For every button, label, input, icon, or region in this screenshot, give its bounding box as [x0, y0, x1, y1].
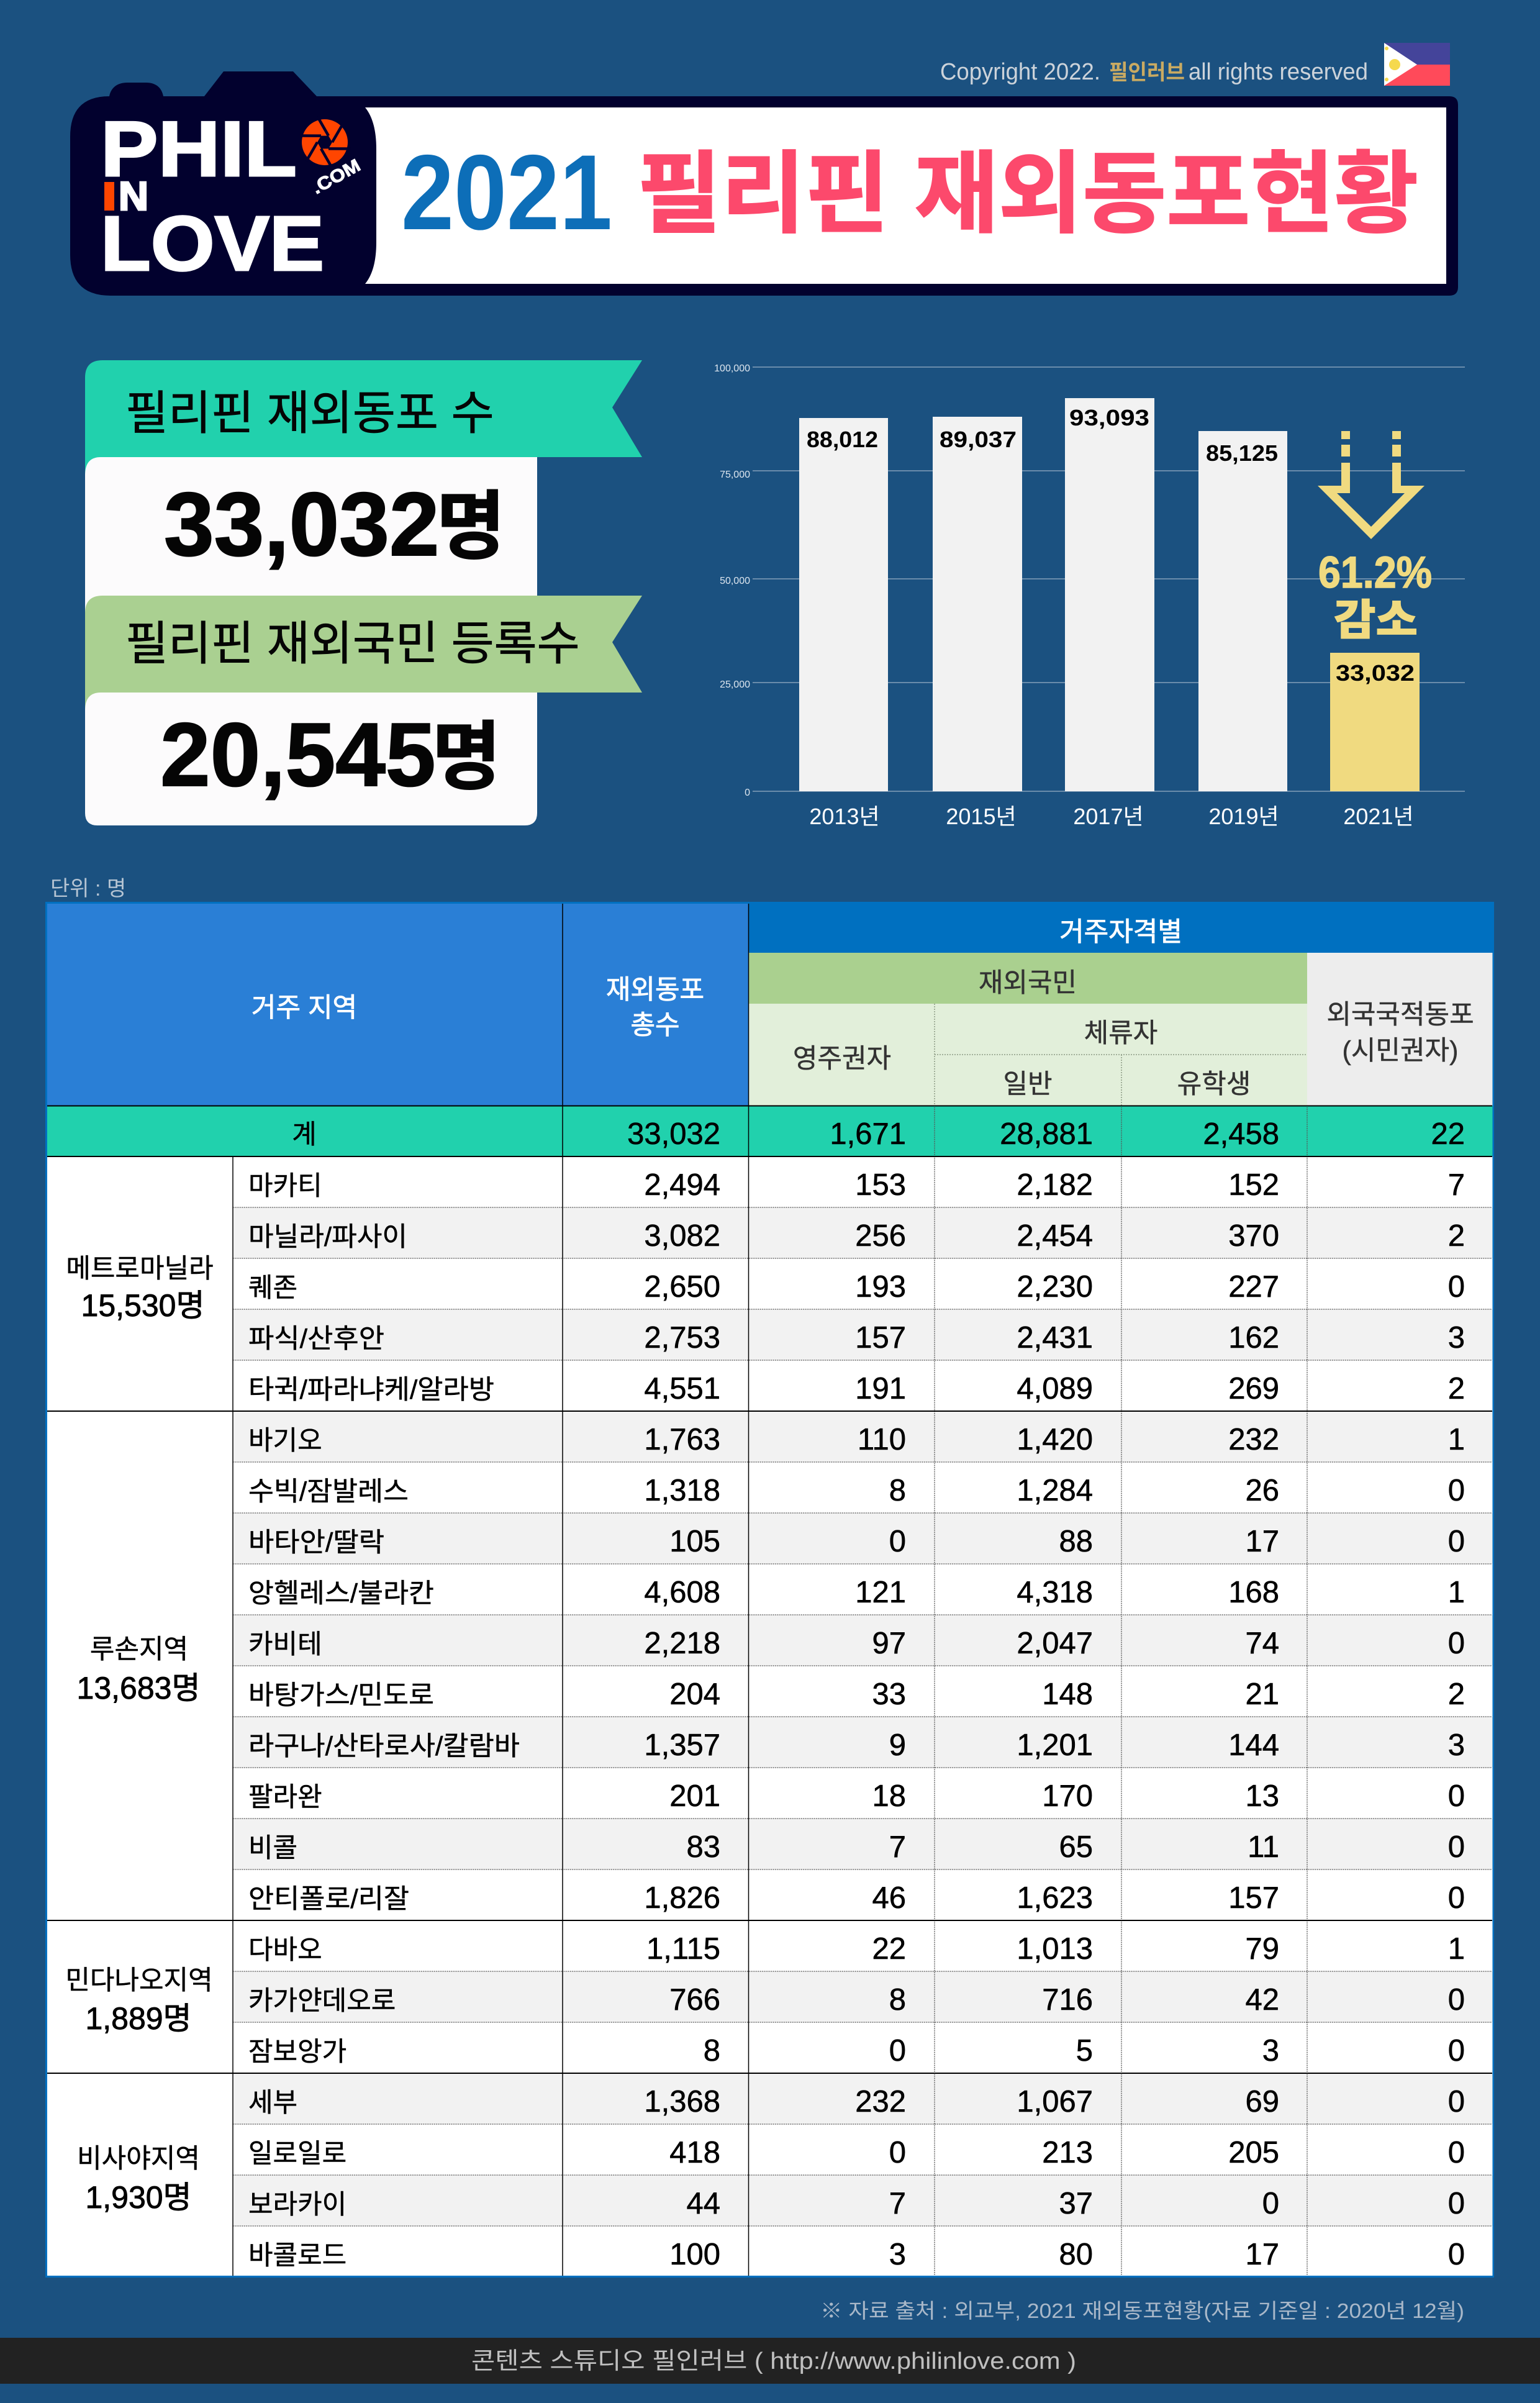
copyright line: Copyright 2022.: [940, 59, 1100, 85]
row: 바기오: 232: [1228, 1423, 1279, 1456]
row: 바콜로드: 3: [889, 2238, 906, 2271]
row: 라구나/산타로사/칼람바: 라구나/산타로사/칼람바: [248, 1732, 520, 1761]
row: 세부: 232: [855, 2085, 906, 2119]
row: 앙헬레스/불라칸: 앙헬레스/불라칸: [248, 1579, 434, 1609]
row: 퀘존: 0: [1448, 1270, 1465, 1304]
row: 카가얀데오로: 0: [1448, 1983, 1465, 2017]
row: 마카티: 153: [855, 1168, 906, 1202]
total row: [47, 1106, 1493, 1156]
row: 라구나/산타로사/칼람바: 1,201: [1017, 1728, 1093, 1762]
callout: 61.2% decrease: 감소: [1334, 597, 1418, 644]
row: 파식/산후안: 3: [1448, 1321, 1465, 1355]
region: mindanao: 민다나오지역: [65, 1966, 213, 1996]
row: 다바오: 22: [872, 1932, 906, 1966]
panel: overseas korean count: [85, 360, 642, 621]
title text: [401, 133, 1418, 252]
row: 앙헬레스/불라칸: 4,318: [1017, 1576, 1093, 1609]
bar: 2021: 33,032: [1336, 660, 1415, 686]
row: 비콜: 0: [1448, 1830, 1465, 1864]
footer bar: 콘텐츠 스튜디오 필인러브 ( http://www.philinlove.com ): [471, 2348, 1076, 2374]
region: mindanao: [65, 1966, 213, 2036]
region: metro manila: [66, 1254, 214, 1323]
row: 라구나/산타로사/칼람바: 144: [1228, 1728, 1279, 1762]
row: 바콜로드: [248, 2238, 1465, 2271]
row: 보라카이: [233, 2175, 1493, 2226]
row: 타귁/파라냐케/알라방: 191: [855, 1372, 906, 1406]
table header: 체류자: [1084, 1019, 1157, 1048]
row: 세부: 0: [1448, 2085, 1465, 2119]
row: 일로일로: 205: [1228, 2136, 1279, 2169]
table header: 재외국민: [979, 968, 1077, 998]
row: 보라카이: 보라카이: [248, 2190, 346, 2220]
row: 파식/산후안: 162: [1228, 1321, 1279, 1355]
table header: 거주 지역: [251, 993, 357, 1023]
row: 팔라완: 팔라완: [248, 1783, 322, 1812]
row: 다바오: 다바오: [248, 1935, 322, 1965]
row: 바타안/딸락: 105: [669, 1525, 720, 1558]
row: 마닐라/파사이: 2,454: [1017, 1219, 1093, 1253]
row: 잠보앙가: 5: [1076, 2034, 1093, 2068]
row: 바타안/딸락: 88: [1059, 1525, 1093, 1558]
row: 라구나/산타로사/칼람바: 3: [1448, 1728, 1465, 1762]
card: 20,545: [85, 693, 537, 825]
row: 마카티: 7: [1448, 1168, 1465, 1202]
row: 일로일로: 0: [889, 2136, 906, 2169]
region: visayas: 비사야지역: [77, 2144, 200, 2174]
bar: 2021: 2021년: [1343, 804, 1414, 829]
row: 보라카이: 0: [1262, 2187, 1279, 2220]
bar: 2019: 85,125: [1206, 440, 1278, 466]
row: 일로일로: 213: [1042, 2136, 1093, 2169]
bar: 2019: 2019년: [1208, 804, 1279, 829]
chart gridlines and y axis: 25,000: [720, 679, 750, 690]
row: 잠보앙가: 0: [889, 2034, 906, 2068]
row: 바콜로드: 80: [1059, 2238, 1093, 2271]
row: 안티폴로/리잘: [248, 1881, 1465, 1915]
copyright line: [940, 59, 1368, 85]
logo wordmark: LOVE: [101, 201, 324, 287]
bar: 2017: 93,093: [1069, 405, 1149, 430]
footer bar: [0, 2338, 1540, 2384]
row: 세부: [233, 2073, 1493, 2124]
logo wordmark: [101, 105, 364, 287]
row: 비콜: 65: [1059, 1830, 1093, 1864]
row: 일로일로: 0: [1448, 2136, 1465, 2169]
card: 20,545: 명: [432, 715, 500, 799]
panel: registered nationals count: [85, 596, 642, 825]
row: 카가얀데오로: 8: [889, 1983, 906, 2017]
row: 라구나/산타로사/칼람바: 1,357: [644, 1728, 720, 1762]
table header: [47, 904, 1493, 1106]
row: 바기오: 1,763: [644, 1423, 720, 1456]
row: 비콜: 11: [1248, 1830, 1279, 1864]
bar chart: [714, 363, 1465, 829]
copyright line: all rights reserved: [1189, 59, 1368, 85]
row: 퀘존: 193: [855, 1270, 906, 1304]
row: 안티폴로/리잘: 46: [872, 1881, 906, 1915]
camera body rounded edge: [354, 107, 376, 284]
region: luzon: 루손지역: [90, 1635, 188, 1665]
bar: 2013: 88,012: [807, 427, 878, 452]
row: 잠보앙가: [248, 2034, 1465, 2068]
table header: 외국국적동포: [1326, 1000, 1474, 1030]
row: 잠보앙가: 8: [704, 2034, 720, 2068]
row: 안티폴로/리잘: 1,826: [644, 1881, 720, 1915]
row: 비콜: 7: [889, 1830, 906, 1864]
card: 20,545: 20,545: [160, 704, 436, 805]
card: 33,032: 33,032: [164, 474, 440, 575]
ribbon: overseas koreans: [85, 360, 642, 481]
row: 일로일로: 일로일로: [248, 2139, 346, 2169]
row: 마닐라/파사이: 2: [1448, 1219, 1465, 1253]
region: metro manila: 15,530명: [81, 1288, 204, 1323]
row: 수빅/잠발레스: 수빅/잠발레스: [248, 1477, 409, 1507]
row: 세부: 1,067: [1017, 2085, 1093, 2119]
row: 잠보앙가: 잠보앙가: [248, 2037, 346, 2067]
row: 카가얀데오로: 716: [1042, 1983, 1093, 2017]
region: metro manila: 메트로마닐라: [66, 1254, 214, 1284]
chart gridlines and y axis: 0: [745, 788, 750, 798]
row: 바기오: 110: [858, 1423, 906, 1456]
row: 안티폴로/리잘: 157: [1228, 1881, 1279, 1915]
table header: 유학생: [1177, 1070, 1251, 1099]
row: 카비테: 0: [1448, 1627, 1465, 1660]
row: 팔라완: 13: [1245, 1779, 1279, 1813]
ribbon: registered nationals: 필리핀 재외국민 등록수: [125, 617, 580, 670]
row: 다바오: [248, 1932, 1465, 1966]
total row: 33,032: [627, 1117, 720, 1151]
row: 마닐라/파사이: 256: [855, 1219, 906, 1253]
row: 라구나/산타로사/칼람바: 9: [889, 1728, 906, 1762]
row: 퀘존: 227: [1228, 1270, 1279, 1304]
row: 카비테: 카비테: [248, 1630, 322, 1660]
row: 수빅/잠발레스: 0: [1448, 1474, 1465, 1507]
chart gridlines and y axis: [714, 363, 1465, 798]
bar: 2021: [1330, 653, 1420, 829]
row: 파식/산후안: 파식/산후안: [248, 1324, 384, 1354]
row: 수빅/잠발레스: [248, 1474, 1465, 1507]
ribbon: overseas koreans: 필리핀 재외동포 수: [125, 387, 494, 439]
unit label: 단위 : 명: [50, 877, 126, 901]
row: 다바오: 1,115: [646, 1932, 720, 1966]
row: 비콜: 83: [686, 1830, 720, 1864]
table header: 영주권자: [793, 1044, 891, 1074]
row: 카가얀데오로: 42: [1245, 1983, 1279, 2017]
row: 앙헬레스/불라칸: 1: [1448, 1576, 1465, 1609]
callout: 61.2% decrease: [1318, 548, 1432, 644]
card: 33,032: [85, 457, 537, 621]
row: 일로일로: [248, 2136, 1465, 2169]
row: 수빅/잠발레스: 26: [1245, 1474, 1279, 1507]
row: 바탕가스/민도로: 33: [872, 1678, 906, 1711]
row: 잠보앙가: 3: [1262, 2034, 1279, 2068]
region: visayas: [77, 2144, 200, 2215]
logo wordmark: .COM: [309, 156, 364, 198]
row: 카비테: 97: [872, 1627, 906, 1660]
row: 팔라완: [248, 1779, 1465, 1813]
row: 바타안/딸락: 17: [1245, 1525, 1279, 1558]
row: 파식/산후안: 2,431: [1017, 1321, 1093, 1355]
row: 카비테: 2,047: [1017, 1627, 1093, 1660]
row: 바타안/딸락: 바타안/딸락: [248, 1528, 384, 1558]
region: visayas: 1,930명: [85, 2180, 192, 2215]
row: 안티폴로/리잘: 안티폴로/리잘: [248, 1884, 409, 1914]
row: 보라카이: 44: [686, 2187, 720, 2220]
row: 타귁/파라냐케/알라방: 4,089: [1017, 1372, 1093, 1406]
title text: 2021: [401, 133, 612, 252]
row: 바기오: 1,420: [1017, 1423, 1093, 1456]
logo wordmark: PHIL: [101, 105, 297, 193]
row: 바탕가스/민도로: 2: [1448, 1678, 1465, 1711]
row: 바탕가스/민도로: 148: [1042, 1678, 1093, 1711]
row: 바콜로드: 17: [1245, 2238, 1279, 2271]
row: 타귁/파라냐케/알라방: 2: [1448, 1372, 1465, 1406]
row: 마카티: 2,494: [644, 1168, 720, 1202]
chart gridlines and y axis: 100,000: [714, 363, 750, 374]
table header: 일반: [1003, 1070, 1053, 1099]
row: 안티폴로/리잘: 1,623: [1017, 1881, 1093, 1915]
row: 카비테: 74: [1245, 1627, 1279, 1660]
row: 잠보앙가: 0: [1448, 2034, 1465, 2068]
bar: 2013: [799, 418, 888, 829]
row: 팔라완: 0: [1448, 1779, 1465, 1813]
row: 바기오: 바기오: [248, 1426, 322, 1456]
icon: philippine flag: [1384, 43, 1450, 86]
camera body and banner frame: [70, 71, 1458, 296]
row: 바기오: [233, 1411, 1493, 1462]
row: 팔라완: 170: [1042, 1779, 1093, 1813]
total row: 계: [292, 1120, 317, 1150]
row: 안티폴로/리잘: 0: [1448, 1881, 1465, 1915]
row: 비콜: [233, 1819, 1493, 1869]
title panel: [365, 107, 1446, 284]
row: 라구나/산타로사/칼람바: [233, 1717, 1493, 1768]
chart gridlines and y axis: 50,000: [720, 576, 750, 586]
row: 수빅/잠발레스: 1,318: [644, 1474, 720, 1507]
row: 마닐라/파사이: 마닐라/파사이: [248, 1222, 407, 1252]
row: 타귁/파라냐케/알라방: 4,551: [644, 1372, 720, 1406]
row: 타귁/파라냐케/알라방: [248, 1372, 1465, 1406]
total row: 28,881: [1000, 1117, 1093, 1151]
row: 바콜로드: 100: [669, 2238, 720, 2271]
row: 카가얀데오로: 카가얀데오로: [248, 1986, 396, 2016]
row: 퀘존: [248, 1270, 1465, 1304]
row: 바탕가스/민도로: 바탕가스/민도로: [248, 1681, 434, 1710]
row: 세부: 1,368: [644, 2085, 720, 2119]
row: 바콜로드: 바콜로드: [248, 2241, 346, 2271]
row: 퀘존: 2,230: [1017, 1270, 1093, 1304]
row: 마닐라/파사이: 370: [1228, 1219, 1279, 1253]
row: 바타안/딸락: [233, 1513, 1493, 1564]
row: 타귁/파라냐케/알라방: 타귁/파라냐케/알라방: [248, 1375, 494, 1405]
bar: 2017: [1065, 398, 1154, 829]
bar: 2015: 2015년: [946, 804, 1017, 829]
row: 마닐라/파사이: 3,082: [644, 1219, 720, 1253]
row: 바타안/딸락: 0: [1448, 1525, 1465, 1558]
region: luzon: [77, 1635, 200, 1706]
row: 파식/산후안: 2,753: [644, 1321, 720, 1355]
row: 카가얀데오로: [233, 1971, 1493, 2022]
row: 앙헬레스/불라칸: 4,608: [644, 1576, 720, 1609]
row: 비콜: 비콜: [248, 1833, 297, 1863]
bar: 2019: [1198, 431, 1287, 829]
row: 마카티: 152: [1228, 1168, 1279, 1202]
callout: 61.2% decrease: 61.2%: [1318, 548, 1432, 597]
region: mindanao: 1,889명: [85, 2001, 192, 2036]
row: 팔라완: 18: [872, 1779, 906, 1813]
row: 보라카이: 37: [1059, 2187, 1093, 2220]
region: luzon: 13,683명: [77, 1671, 200, 1706]
bar: 2015: 89,037: [940, 427, 1017, 452]
row: 다바오: 1: [1448, 1932, 1465, 1966]
chart gridlines and y axis: 75,000: [720, 470, 750, 480]
table header: 거주자격별: [1059, 917, 1182, 947]
row: 마카티: 마카티: [248, 1171, 322, 1201]
row: 다바오: 1,013: [1017, 1932, 1093, 1966]
data table: [45, 902, 1494, 2278]
row: 앙헬레스/불라칸: 168: [1228, 1576, 1279, 1609]
title text: 필리핀 재외동포현황: [637, 144, 1418, 244]
total row: 1,671: [830, 1117, 906, 1151]
row: 카비테: [233, 1615, 1493, 1666]
row: 마닐라/파사이: [233, 1207, 1493, 1258]
row: 카비테: 2,218: [644, 1627, 720, 1660]
row: 파식/산후안: 157: [855, 1321, 906, 1355]
row: 바탕가스/민도로: [248, 1678, 1465, 1711]
bar: 2013: 2013년: [809, 804, 880, 829]
row: 세부: 세부: [248, 2088, 297, 2118]
row: 바탕가스/민도로: 21: [1245, 1678, 1279, 1711]
logo wordmark: N: [119, 173, 148, 219]
row: 바타안/딸락: 0: [889, 1525, 906, 1558]
icon: camera aperture: [299, 117, 351, 168]
card: 33,032: 명: [437, 485, 505, 568]
title banner with camera logo: [70, 71, 1458, 296]
row: 앙헬레스/불라칸: 121: [855, 1576, 906, 1609]
row: 일로일로: 418: [669, 2136, 720, 2169]
bar: 2015: [933, 417, 1022, 829]
total row: 22: [1431, 1117, 1465, 1151]
arrow: decrease: [1318, 431, 1424, 539]
row: 수빅/잠발레스: 1,284: [1017, 1474, 1093, 1507]
source note: ※ 자료 출처 : 외교부, 2021 재외동포현황(자료 기준일 : 2020년 12월): [820, 2299, 1464, 2322]
row: 바콜로드: 0: [1448, 2238, 1465, 2271]
row: 바탕가스/민도로: 204: [669, 1678, 720, 1711]
row: 바기오: 1: [1448, 1423, 1465, 1456]
row: 수빅/잠발레스: 8: [889, 1474, 906, 1507]
row: 퀘존: 2,650: [644, 1270, 720, 1304]
row: 퀘존: 퀘존: [248, 1273, 297, 1303]
row: 앙헬레스/불라칸: [248, 1576, 1465, 1609]
bar: 2017: 2017년: [1073, 804, 1144, 829]
total row: 2,458: [1203, 1117, 1279, 1151]
row: 카가얀데오로: 766: [669, 1983, 720, 2017]
row: 파식/산후안: [233, 1309, 1493, 1360]
table header: 재외동포: [606, 975, 704, 1005]
row: 타귁/파라냐케/알라방: 269: [1228, 1372, 1279, 1406]
table header: 총수: [630, 1011, 680, 1040]
row: 보라카이: 0: [1448, 2187, 1465, 2220]
copyright line: 필인러브: [1109, 61, 1185, 84]
ribbon: registered nationals: [85, 596, 642, 717]
row: 보라카이: 7: [889, 2187, 906, 2220]
row: 마카티: [248, 1168, 1465, 1202]
row: 팔라완: 201: [669, 1779, 720, 1813]
row: 다바오: 79: [1245, 1932, 1279, 1966]
table header: (시민권자): [1343, 1036, 1458, 1066]
row: 마카티: 2,182: [1017, 1168, 1093, 1202]
row: 세부: 69: [1245, 2085, 1279, 2119]
